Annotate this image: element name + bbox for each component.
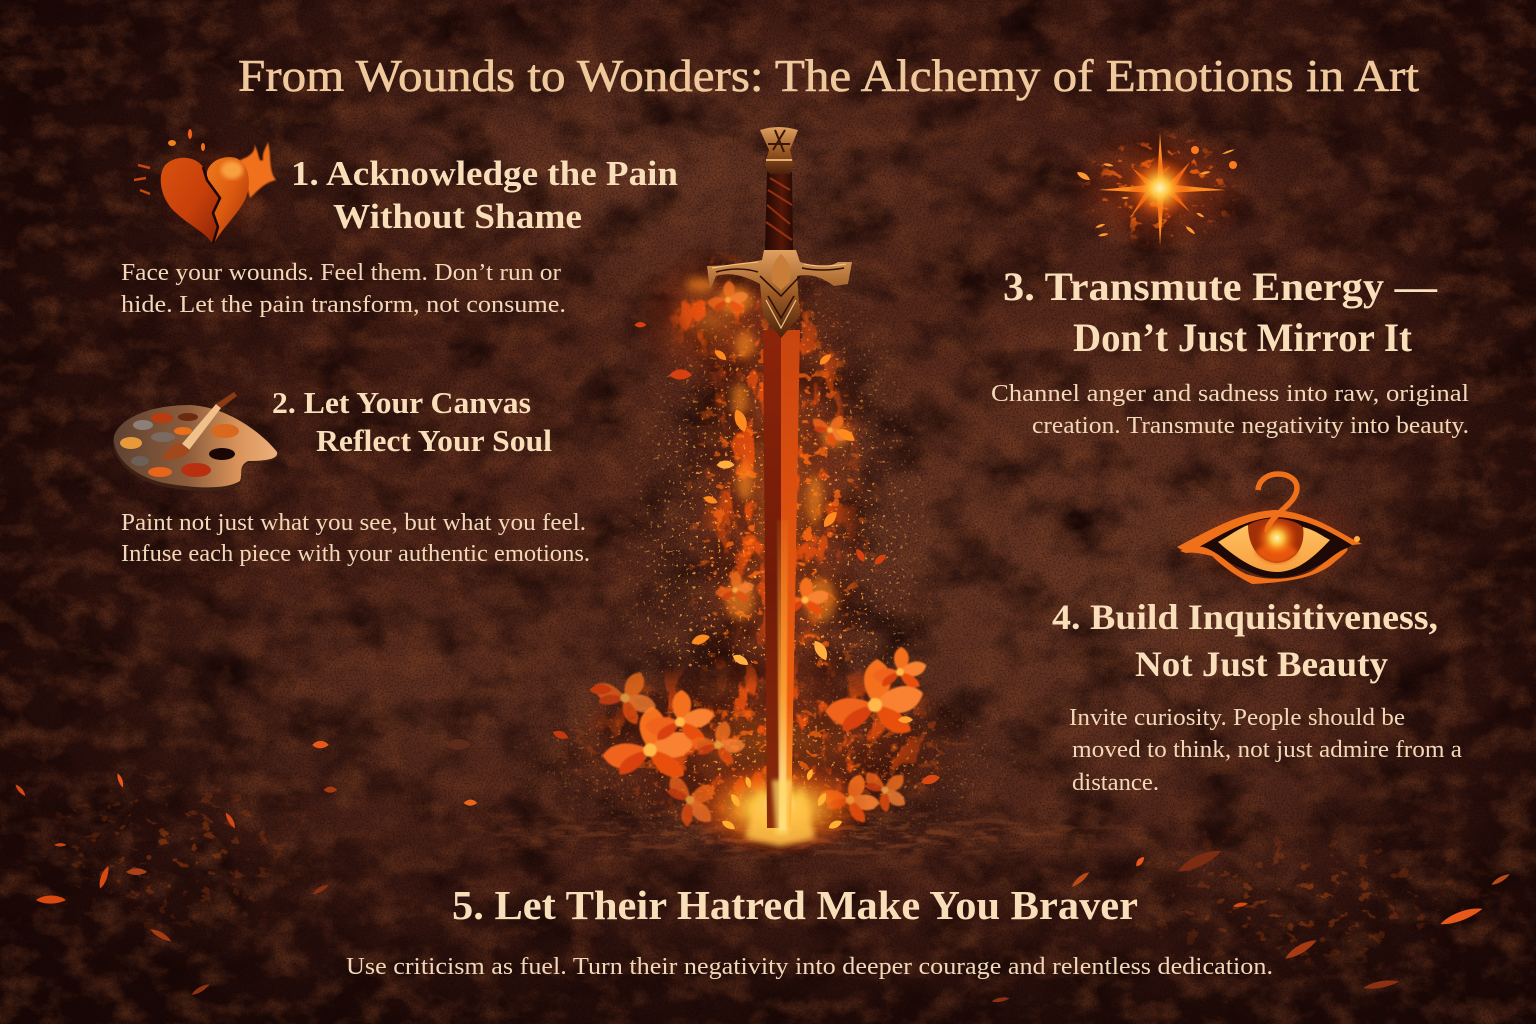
text: step 3: Channel anger and sadness into raw, original [991, 381, 1469, 407]
title: From Wounds to Wonders: The Alchemy of Emotions in Art [238, 50, 1419, 101]
panel: step 5 [346, 882, 1273, 980]
fire petals and flowers [552, 281, 941, 856]
sword fire glow [502, 198, 1034, 870]
icon: glowing eye with question mark [1172, 474, 1372, 590]
text: step 1 [121, 260, 566, 318]
heading: step 2: 2. Let Your Canvas [272, 385, 531, 420]
heading: step 3: 3. Transmute Energy — [1003, 264, 1438, 309]
sword pommel [760, 127, 798, 174]
text: step 3 [991, 381, 1469, 439]
text: step 2: Paint not just what you see, but what you feel. [121, 510, 586, 536]
icon: starburst [1076, 129, 1244, 246]
heading: step 3: Don’t Just Mirror It [1073, 315, 1413, 360]
sword grip [765, 172, 793, 252]
sword crossguard [707, 250, 852, 338]
text: step 2 [121, 510, 590, 567]
panel: step 2 [113, 385, 590, 567]
text: step 1: hide. Let the pain transform, not consume. [121, 292, 566, 318]
base flames [686, 735, 870, 856]
icon: flaming sword [707, 127, 852, 835]
heading: step 1: Without Shame [333, 197, 582, 236]
floor embers [16, 739, 1510, 1002]
panel: step 4 [1052, 474, 1462, 796]
heading: step 4: Not Just Beauty [1135, 644, 1388, 684]
text: step 5: Use criticism as fuel. Turn their negativity into deeper courage and relentless dedication. [346, 954, 1273, 980]
text: step 3: creation. Transmute negativity into beauty. [1032, 413, 1469, 439]
heading: step 4: 4. Build Inquisitiveness, [1052, 597, 1438, 637]
text: step 2: Infuse each piece with your authentic emotions. [121, 541, 590, 567]
icon: painter's palette [113, 392, 278, 491]
icon: broken burning heart [134, 129, 277, 243]
sword blade [763, 330, 800, 835]
panel: step 1 [121, 129, 678, 318]
text: step 4: moved to think, not just admire from a [1072, 737, 1462, 763]
heading: step 1 [291, 154, 678, 236]
panel: step 3 [992, 129, 1468, 438]
heading: step 4 [1052, 597, 1438, 684]
heading: step 5: 5. Let Their Hatred Make You Braver [452, 882, 1138, 928]
text: step 4 [1069, 705, 1462, 796]
text: step 4: Invite curiosity. People should be [1069, 705, 1405, 731]
heading: step 1: 1. Acknowledge the Pain [291, 154, 678, 193]
text: step 1: Face your wounds. Feel them. Don’t run or [121, 260, 561, 286]
heading: step 2: Reflect Your Soul [316, 423, 552, 458]
heading: step 2 [272, 385, 552, 458]
heading: step 3 [1003, 264, 1438, 360]
text: step 4: distance. [1072, 770, 1159, 796]
